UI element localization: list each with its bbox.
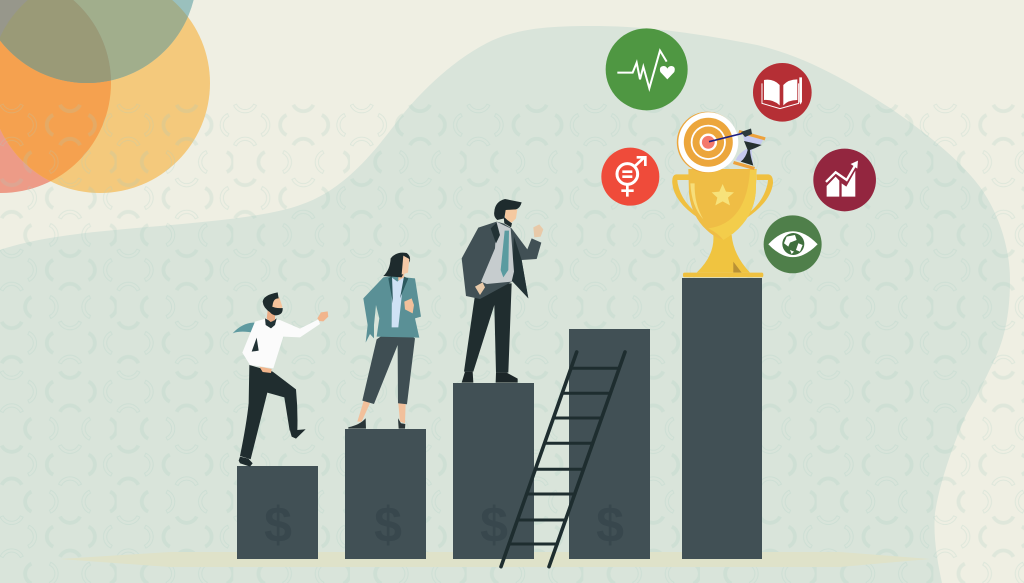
bar 1 xyxy=(237,466,318,559)
bar 4: $ xyxy=(596,497,624,553)
star xyxy=(712,184,734,205)
trophy xyxy=(672,169,773,277)
target xyxy=(677,112,738,173)
jacket inner shade xyxy=(512,237,528,298)
face xyxy=(505,209,517,223)
heels xyxy=(348,418,405,429)
icon: economic growth circle xyxy=(813,149,876,211)
icon: eye and globe circle xyxy=(764,215,822,273)
base xyxy=(683,273,763,277)
tie xyxy=(501,231,509,277)
jacket xyxy=(462,222,541,299)
ankles xyxy=(357,400,406,423)
shoes xyxy=(239,429,306,467)
icon: health circle xyxy=(606,28,688,110)
hand in pocket xyxy=(475,282,485,295)
bar 3 xyxy=(453,383,534,559)
trousers xyxy=(464,283,512,373)
hands xyxy=(259,311,328,373)
beard xyxy=(504,217,512,227)
bar 2 xyxy=(345,429,426,559)
person: man stepping up xyxy=(233,292,328,467)
face xyxy=(402,256,409,275)
collar and tie xyxy=(252,318,277,352)
neck xyxy=(267,311,275,322)
bar 3: $ xyxy=(480,497,508,553)
bar 5 xyxy=(682,278,762,559)
blouse xyxy=(392,276,404,327)
person: man in grey suit xyxy=(462,199,543,383)
handles xyxy=(672,174,773,218)
shirt xyxy=(242,318,320,368)
plates xyxy=(733,130,766,170)
shoes xyxy=(462,372,518,383)
neck xyxy=(398,272,404,281)
person: woman in teal jacket xyxy=(348,253,421,429)
trousers xyxy=(240,365,297,459)
icon: education circle xyxy=(753,63,812,122)
stem xyxy=(697,235,750,273)
lapels xyxy=(491,223,500,243)
hair xyxy=(494,199,522,220)
cup highlight xyxy=(690,183,703,219)
fist xyxy=(533,224,543,237)
hair xyxy=(263,292,279,313)
cup bright side xyxy=(708,169,757,240)
face xyxy=(270,297,282,313)
bar 1: $ xyxy=(264,497,292,553)
hand xyxy=(404,298,414,313)
ladder xyxy=(501,352,625,567)
cup xyxy=(688,169,757,240)
overlapping circles xyxy=(0,0,210,193)
jacket xyxy=(363,276,421,343)
hair xyxy=(383,253,410,277)
glass xyxy=(736,133,763,164)
hourglass xyxy=(733,130,766,170)
beard xyxy=(269,306,283,315)
bar 2: $ xyxy=(374,497,402,553)
sand xyxy=(741,141,762,166)
lapels xyxy=(388,276,408,303)
shirt xyxy=(481,222,514,284)
icon: gender equality circle xyxy=(601,148,659,206)
arrow xyxy=(709,128,752,142)
trousers xyxy=(362,328,415,404)
stem shadow xyxy=(733,262,742,273)
ground band xyxy=(60,552,930,567)
flying tie xyxy=(233,323,273,333)
bar 4 xyxy=(569,329,650,559)
